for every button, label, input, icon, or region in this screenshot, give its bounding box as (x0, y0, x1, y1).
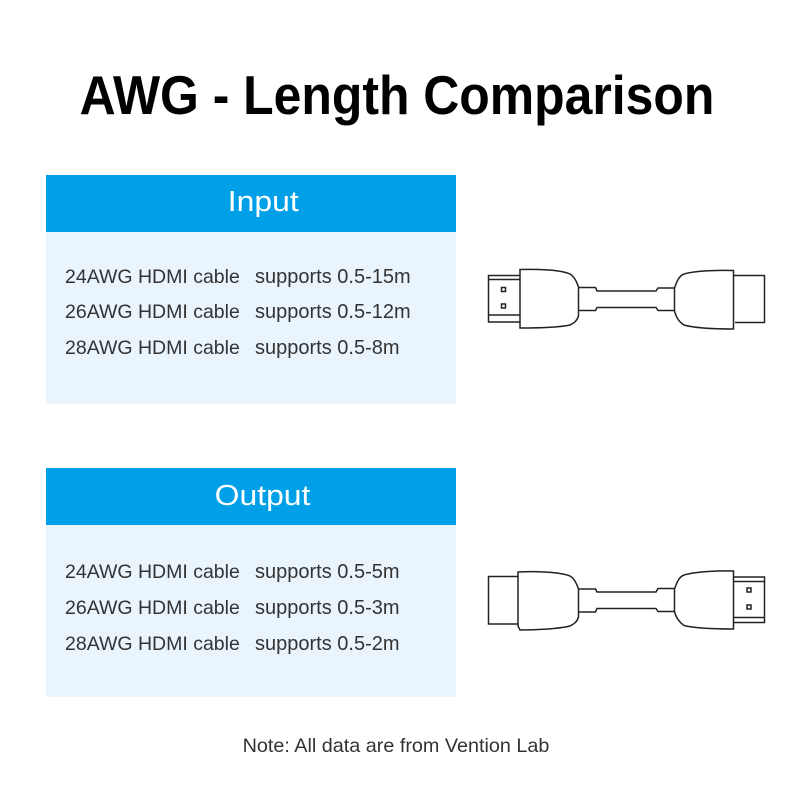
output row 28AWG: 28AWG HDMI cable (65, 633, 240, 655)
output heading (46, 468, 456, 525)
output row 28AWG (65, 633, 400, 655)
output row 24AWG: 24AWG HDMI cable (65, 561, 240, 583)
panel: input (46, 175, 456, 404)
input row 24AWG: 24AWG HDMI cable (65, 266, 240, 288)
output heading: Output (215, 480, 311, 512)
panel: input: supports 0.5-8m (255, 337, 400, 359)
panel: output (46, 468, 456, 697)
icon: output HDMI cable (488, 571, 764, 630)
input row 28AWG (65, 337, 400, 359)
input row 26AWG: 26AWG HDMI cable (65, 301, 240, 323)
icon: input HDMI cable (488, 269, 764, 329)
panel: input: supports 0.5-15m (255, 266, 411, 288)
panel: output: supports 0.5-3m (255, 597, 400, 619)
output row 24AWG (65, 561, 400, 583)
output row 26AWG: 26AWG HDMI cable (65, 597, 240, 619)
panel: input: supports 0.5-12m (255, 301, 411, 323)
input row 26AWG (65, 301, 411, 323)
note: Note: All data are from Vention Lab (243, 735, 549, 757)
input row 28AWG: 28AWG HDMI cable (65, 337, 240, 359)
output row 26AWG (65, 597, 400, 619)
input heading: Input (228, 186, 298, 218)
title: AWG - Length Comparison (80, 64, 714, 126)
panel: output: supports 0.5-2m (255, 633, 400, 655)
input heading (46, 175, 456, 232)
input row 24AWG (65, 266, 411, 288)
panel: output: supports 0.5-5m (255, 561, 400, 583)
